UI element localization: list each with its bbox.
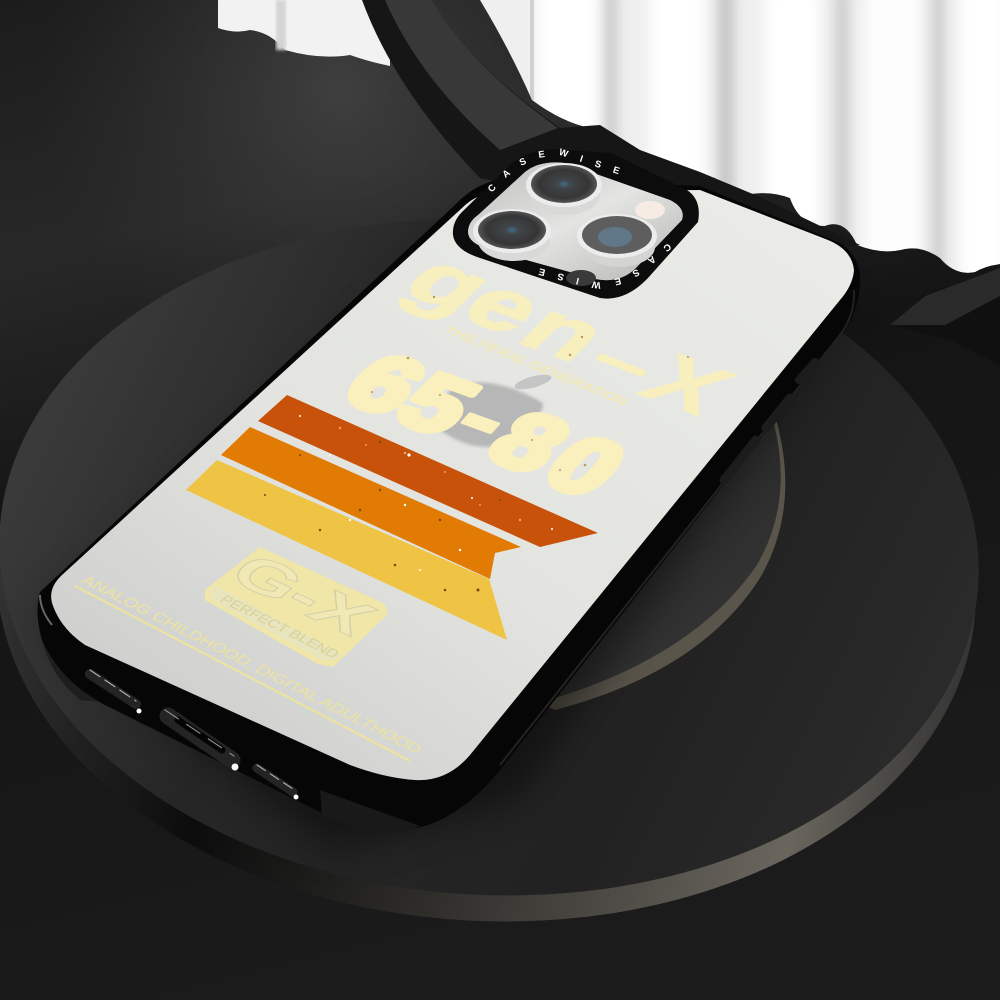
brand text on camera ring: CASEWISE — [488, 148, 620, 192]
stripe: red — [258, 395, 598, 547]
heading: gen-X: n — [501, 288, 628, 376]
side buttons — [724, 362, 815, 480]
years: 65-80: 6 — [324, 337, 446, 432]
badge: G-X perfect blend — [205, 545, 389, 667]
stripe: yellow — [186, 460, 507, 640]
apple logo shadow — [440, 372, 553, 447]
tagline: the feral generation: THE FERAL GENERATION — [441, 324, 632, 408]
brand text on camera ring — [488, 148, 671, 289]
case back: screen — [51, 190, 854, 780]
camera module — [452, 148, 699, 299]
badge: G-X perfect blend: G-X — [217, 545, 389, 645]
phone case body — [37, 178, 860, 832]
bottom ports — [90, 670, 298, 800]
heading: gen-X: e — [444, 263, 566, 349]
badge: G-X perfect blend: PERFECT BLEND — [217, 593, 343, 661]
curtain: left — [218, 0, 390, 66]
speckles — [264, 296, 689, 592]
slogan: analog childhood, digital adulthood: ANALOG CHILDHOOD, DIGITAL ADULTHOOD — [77, 574, 425, 757]
heading: gen-X: X — [621, 340, 754, 430]
years: 65-80: 8 — [468, 395, 590, 490]
dark stand: right — [890, 268, 1000, 365]
years: 65-80 — [324, 337, 646, 514]
heading: gen-X: — — [581, 332, 668, 392]
platform: base disc — [0, 194, 996, 946]
years: 65-80: - — [430, 368, 541, 466]
stripe: orange — [221, 427, 521, 579]
heading: gen-X: g — [386, 239, 513, 327]
brand text on camera ring: CASEWISE — [538, 244, 671, 289]
dark arc stand — [362, 0, 860, 250]
slogan underline — [75, 586, 410, 761]
heading: gen-X — [386, 239, 754, 430]
curtain: right — [480, 0, 1000, 280]
platform: inner raised disc — [400, 290, 785, 710]
years: 65-80: 0 — [524, 419, 646, 514]
phone shadow — [40, 240, 850, 850]
years: 65-80: 5 — [376, 357, 498, 452]
